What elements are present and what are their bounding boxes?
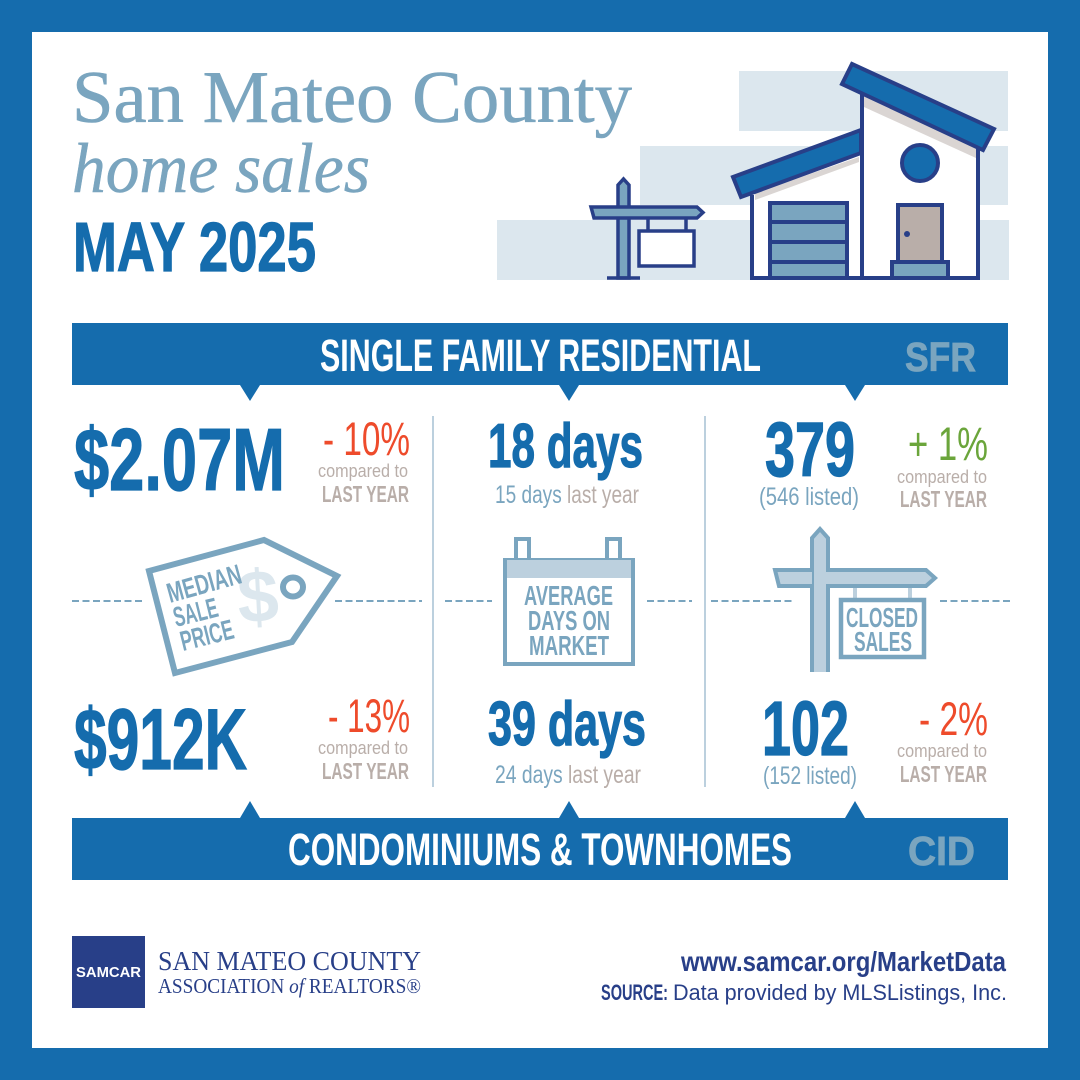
source label: SOURCE: bbox=[601, 980, 668, 1005]
association name: SAN MATEO COUNTY bbox=[158, 946, 421, 976]
banner tag: CID: CID bbox=[908, 828, 975, 874]
panel: closed sales, single family bbox=[759, 407, 988, 512]
icon: calendar, average days on market bbox=[505, 539, 633, 664]
listed count: (152 listed) bbox=[763, 762, 857, 790]
source note: Data provided by MLSListings, Inc. bbox=[673, 980, 1007, 1005]
banner tag: SFR: SFR bbox=[905, 334, 976, 380]
value: 18 days: 18 days bbox=[488, 412, 643, 481]
comparison period: LAST YEAR bbox=[322, 758, 409, 784]
comparison period: LAST YEAR bbox=[900, 761, 987, 787]
comparison note: compared to bbox=[318, 460, 408, 481]
value: $2.07M: $2.07M bbox=[74, 410, 285, 509]
comparison note: compared to bbox=[318, 737, 408, 758]
title line: date: MAY 2025 bbox=[73, 208, 316, 286]
banner: condominiums and townhomes bbox=[72, 801, 1008, 880]
illustration: house and sign bbox=[497, 64, 1009, 280]
icon: closed sales sign bbox=[775, 529, 935, 672]
calendar label: market: MARKET bbox=[529, 630, 609, 661]
title line: county: San Mateo County bbox=[72, 57, 632, 139]
icon: house bbox=[733, 64, 994, 278]
tag hole bbox=[283, 578, 303, 596]
tag label: median: MEDIAN bbox=[163, 559, 245, 609]
change: -2%: - 2% bbox=[919, 692, 988, 745]
logo: SAMCAR bbox=[72, 936, 421, 1008]
title block bbox=[72, 57, 632, 286]
column dividers and dashed guide lines bbox=[72, 416, 1010, 787]
footer source block bbox=[601, 946, 1007, 1005]
tag dollar sign: $ bbox=[235, 554, 281, 639]
comparison note: compared to bbox=[897, 466, 987, 487]
banner: single family residential bbox=[72, 323, 1008, 401]
change: +1%: + 1% bbox=[908, 417, 988, 470]
banner heading: SINGLE FAMILY RESIDENTIAL bbox=[320, 330, 761, 381]
value: $912K: $912K bbox=[74, 692, 247, 788]
icon: for sale sign bbox=[591, 179, 703, 278]
prior year days: 24 days last year bbox=[495, 761, 641, 789]
sign label: closed: CLOSED bbox=[846, 602, 918, 633]
value: 102: 102 bbox=[762, 686, 849, 772]
prior year days: 15 days last year bbox=[495, 481, 639, 509]
title line: home sales: home sales bbox=[72, 130, 370, 208]
panel: closed sales, condos bbox=[762, 686, 988, 790]
sign label: sales: SALES bbox=[854, 626, 912, 657]
banner heading: CONDOMINIUMS & TOWNHOMES bbox=[288, 824, 792, 875]
comparison period: LAST YEAR bbox=[900, 486, 987, 512]
association subtitle: ASSOCIATION of REALTORS® bbox=[158, 974, 421, 998]
calendar label: days on: DAYS ON bbox=[528, 605, 610, 636]
panel: days on market, condos bbox=[488, 690, 646, 789]
value: 379: 379 bbox=[765, 407, 855, 493]
change: -13%: - 13% bbox=[328, 689, 410, 742]
panel: days on market, single family bbox=[488, 412, 643, 509]
value: 39 days: 39 days bbox=[488, 690, 646, 759]
change: -10%: - 10% bbox=[323, 412, 410, 465]
calendar label: average: AVERAGE bbox=[524, 580, 613, 611]
panel: median price, single family bbox=[74, 410, 410, 509]
tag label: sale: SALE bbox=[170, 592, 221, 633]
icon: price tag, median sale price bbox=[149, 540, 337, 673]
tag label: price: PRICE bbox=[177, 614, 237, 657]
background bands bbox=[497, 71, 1009, 280]
logo wordmark: SAMCAR bbox=[76, 965, 142, 981]
panel: median price, condos bbox=[74, 689, 410, 788]
website link: www.samcar.org/MarketData bbox=[680, 946, 1006, 977]
listed count: (546 listed) bbox=[759, 483, 859, 511]
comparison period: LAST YEAR bbox=[322, 481, 409, 507]
comparison note: compared to bbox=[897, 740, 987, 761]
